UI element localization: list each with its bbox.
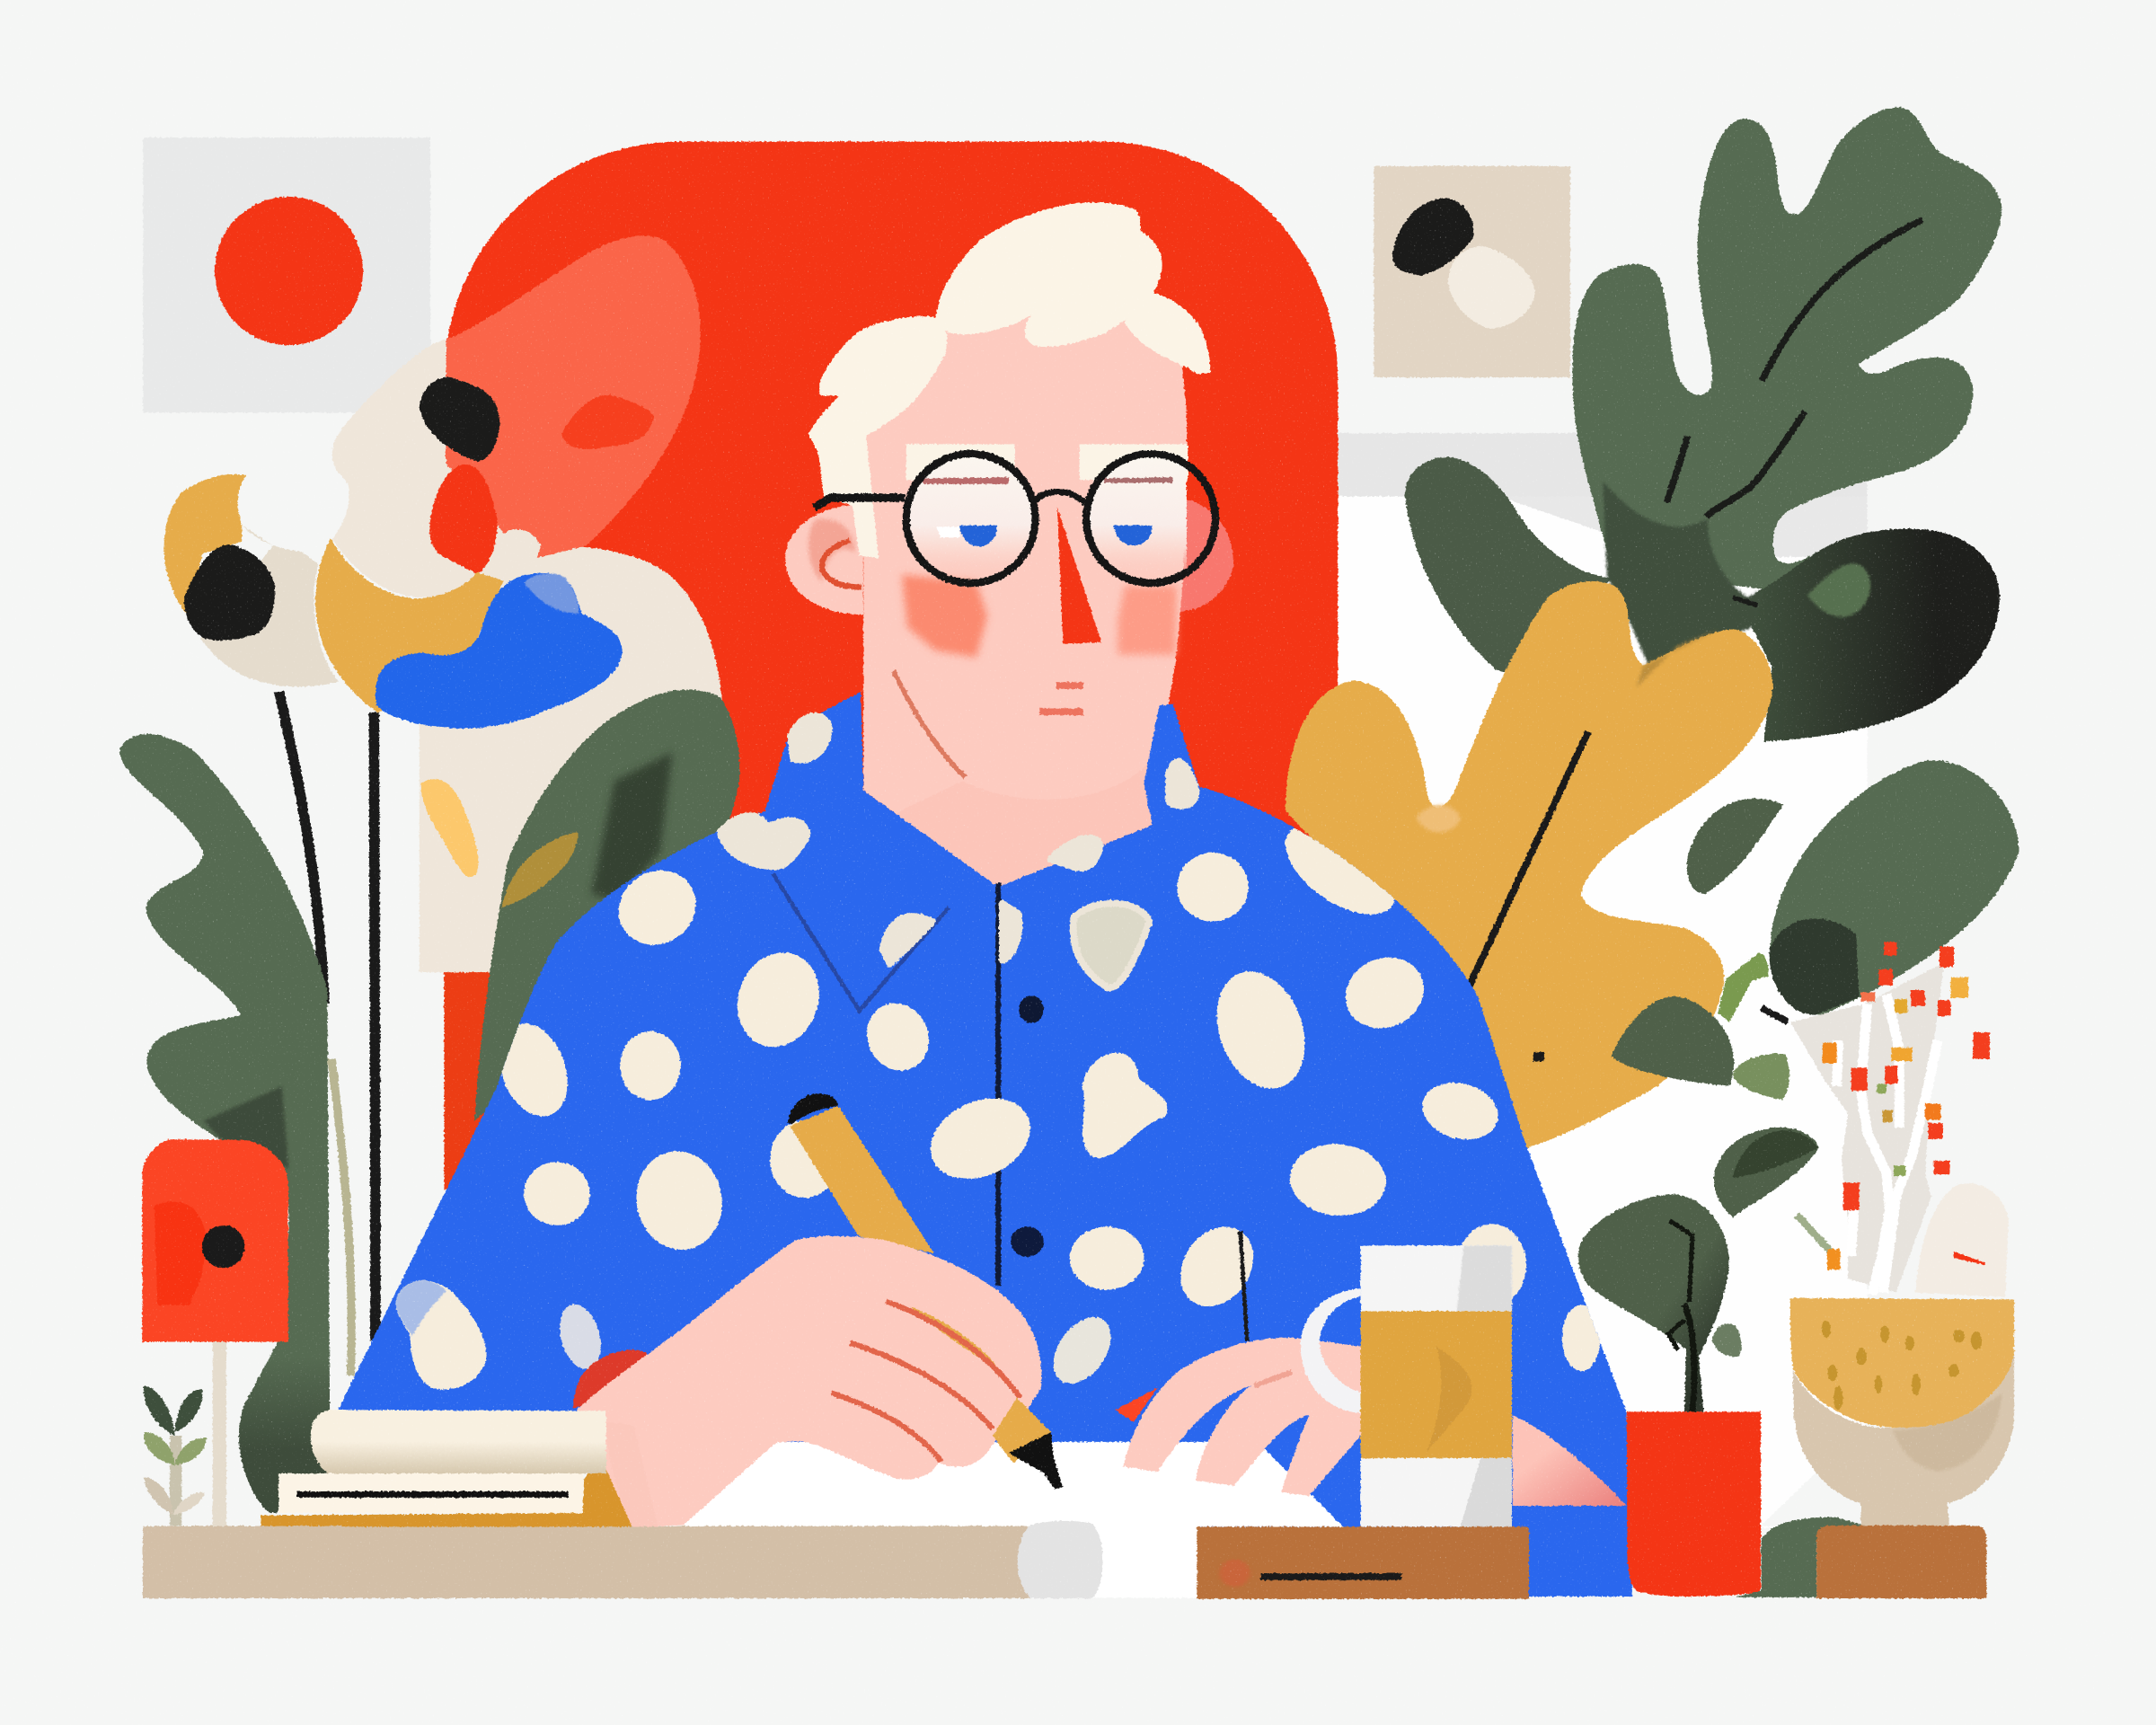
pale petal	[1915, 1183, 2009, 1297]
yellow book	[261, 1469, 632, 1526]
lobe highlight	[1807, 563, 1870, 617]
potted plant leaf	[1578, 1194, 1729, 1411]
finger creases	[831, 1302, 1021, 1462]
hair	[808, 202, 1210, 558]
green stalk	[1797, 1215, 1831, 1252]
lamp inner mark	[155, 1202, 206, 1305]
left cheek blush	[902, 575, 987, 658]
lamp post	[213, 1340, 226, 1526]
dark lower lobe	[1752, 529, 2000, 741]
tiny leaf	[1712, 1323, 1742, 1357]
leaf base shade	[1603, 482, 1763, 666]
red box lamp	[142, 1139, 288, 1341]
right cheek blush	[1118, 586, 1177, 655]
man's far ear	[1176, 498, 1233, 612]
lower book	[278, 1473, 584, 1513]
berries	[1823, 942, 1990, 1269]
buttons	[1019, 995, 1044, 1023]
shirt placket line	[996, 883, 1000, 1286]
white backdrop panel right	[1338, 433, 1868, 1528]
bouquet white stalks	[1837, 995, 1938, 1295]
big green leaf top right	[1405, 107, 2001, 741]
mug band mark	[1426, 1346, 1471, 1453]
pen through fingers	[910, 1306, 1000, 1370]
centre-left leaf	[474, 690, 740, 1120]
art print: abstract blobs	[1374, 166, 1570, 377]
pen barrel	[790, 1106, 934, 1253]
central flower	[315, 236, 701, 729]
paper	[680, 1442, 1343, 1526]
blue shirt	[339, 692, 1630, 1597]
mug body	[1361, 1245, 1512, 1526]
seedling	[144, 1385, 207, 1526]
nose	[1057, 508, 1101, 643]
other hand	[1124, 1338, 1361, 1496]
red pot	[1627, 1411, 1761, 1597]
pen lower barrel	[993, 1398, 1051, 1464]
art print: red sun	[143, 137, 430, 412]
cream sculpture torso	[420, 529, 722, 972]
urn base	[1816, 1526, 1986, 1598]
urn bowl shade	[1893, 1393, 2002, 1472]
desk	[143, 1526, 1030, 1598]
left large leaf	[119, 734, 330, 1513]
left flower	[164, 474, 339, 686]
left stems	[279, 692, 376, 1340]
vine leaf 1	[1612, 996, 1734, 1086]
vine leaf 2	[1733, 1054, 1789, 1100]
lower-left shirt dot	[396, 1280, 486, 1390]
collar outline	[773, 873, 949, 1011]
mug handle	[1301, 1288, 1361, 1413]
jaw line	[894, 671, 965, 777]
bouquet branches	[1790, 962, 1944, 1293]
desk roller	[1018, 1521, 1103, 1598]
desk left segment	[143, 1526, 349, 1598]
main leaf fan	[1572, 107, 2001, 589]
green blob behind base	[1736, 1517, 1864, 1597]
knuckle mark	[1254, 1372, 1292, 1385]
eyebrows, lenses and eyes	[906, 443, 1189, 570]
writing hand	[577, 1236, 1041, 1526]
leaf veins	[1666, 220, 1922, 606]
pot, urn and base group	[1627, 1298, 2014, 1598]
second shirt line	[1241, 1231, 1247, 1340]
hands, paper and desk group	[143, 1093, 1529, 1599]
darker side leaf	[1405, 457, 1611, 676]
vine leaf 3	[1714, 1128, 1818, 1217]
small green leaf	[1687, 799, 1783, 894]
forearm	[1513, 1415, 1627, 1506]
urn yellow bowl	[1790, 1298, 2014, 1428]
shirt dots	[487, 806, 1601, 1394]
left leaf dark stripe	[204, 1086, 288, 1169]
mouth marks	[1056, 682, 1083, 689]
illustration	[119, 106, 2019, 1600]
potted plant stems	[1668, 1221, 1694, 1411]
books, lamp and seedling group	[142, 1139, 658, 1598]
right mid leaf	[1762, 760, 2019, 1022]
mug shade top	[1457, 1245, 1512, 1311]
urn dots	[1822, 1321, 1982, 1410]
pale stalk	[331, 1059, 351, 1376]
lower right plant group	[1578, 942, 2009, 1411]
hand over book edge	[606, 1422, 658, 1526]
glasses	[814, 454, 1215, 583]
book black line	[296, 1491, 569, 1498]
red sleeve fragment	[573, 1349, 648, 1408]
lamp dot	[202, 1225, 244, 1268]
man's head and neck	[863, 309, 1187, 887]
brown coaster	[1197, 1526, 1529, 1599]
mug band	[1361, 1311, 1512, 1458]
vine stem	[1719, 953, 1768, 1022]
coaster line	[1261, 1573, 1401, 1580]
top book	[311, 1410, 606, 1473]
mug shade bottom	[1461, 1458, 1512, 1526]
vine leaf 3 shade	[1733, 1130, 1817, 1178]
red arch backdrop	[444, 142, 1338, 1190]
urn lower bowl	[1793, 1352, 2014, 1526]
petal red mark	[1953, 1252, 1986, 1265]
blue shirt base	[1529, 1508, 1632, 1597]
neck shade	[894, 759, 1153, 887]
sideburn	[818, 436, 879, 558]
man's near ear	[785, 505, 863, 615]
pen cap	[788, 1093, 838, 1125]
collar dots	[720, 716, 1197, 988]
yellow oak leaf	[1286, 581, 1772, 1148]
red wedge under other hand	[1115, 1387, 1158, 1422]
pen tip	[1009, 1432, 1063, 1489]
yellow brush mark on torso	[420, 779, 479, 877]
coaster red smudge	[1220, 1560, 1250, 1587]
